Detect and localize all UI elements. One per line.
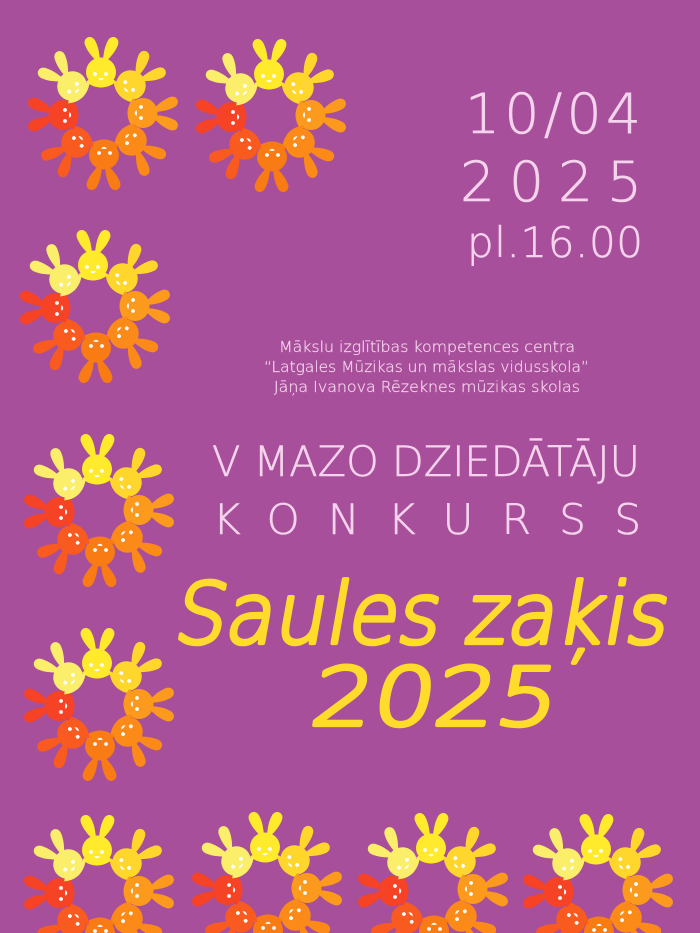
wreath: bottom 2	[190, 810, 344, 933]
time: pl.16.00	[467, 218, 643, 267]
wreath: top second	[194, 37, 348, 194]
wreath: left row 2	[18, 228, 172, 385]
organiser text: Mākslu izglītības kompetences centra	[279, 338, 575, 356]
title: Saules zaķis: Saules zaķis	[168, 565, 679, 664]
wreath: left row 4	[22, 626, 176, 783]
heading: contest name: V MAZO DZIEDĀTĀJU	[212, 437, 640, 486]
wreath: bottom 3	[356, 811, 510, 933]
date: 10/04	[465, 82, 641, 146]
title: 2025: 2025	[305, 652, 567, 745]
wreath: bottom 1	[22, 813, 176, 933]
heading: konkurss: KONKURSS	[213, 495, 641, 544]
organiser text	[264, 338, 589, 396]
wreath: bottom 4	[521, 812, 675, 933]
year: 2025	[460, 150, 642, 214]
organiser text: Jāņa Ivanova Rēzeknes mūzikas skolas	[274, 378, 580, 396]
organiser text: “Latgales Mūzikas un mākslas vidusskola”	[264, 358, 589, 376]
wreath: left row 3	[22, 432, 176, 589]
wreath: top left	[26, 35, 180, 192]
